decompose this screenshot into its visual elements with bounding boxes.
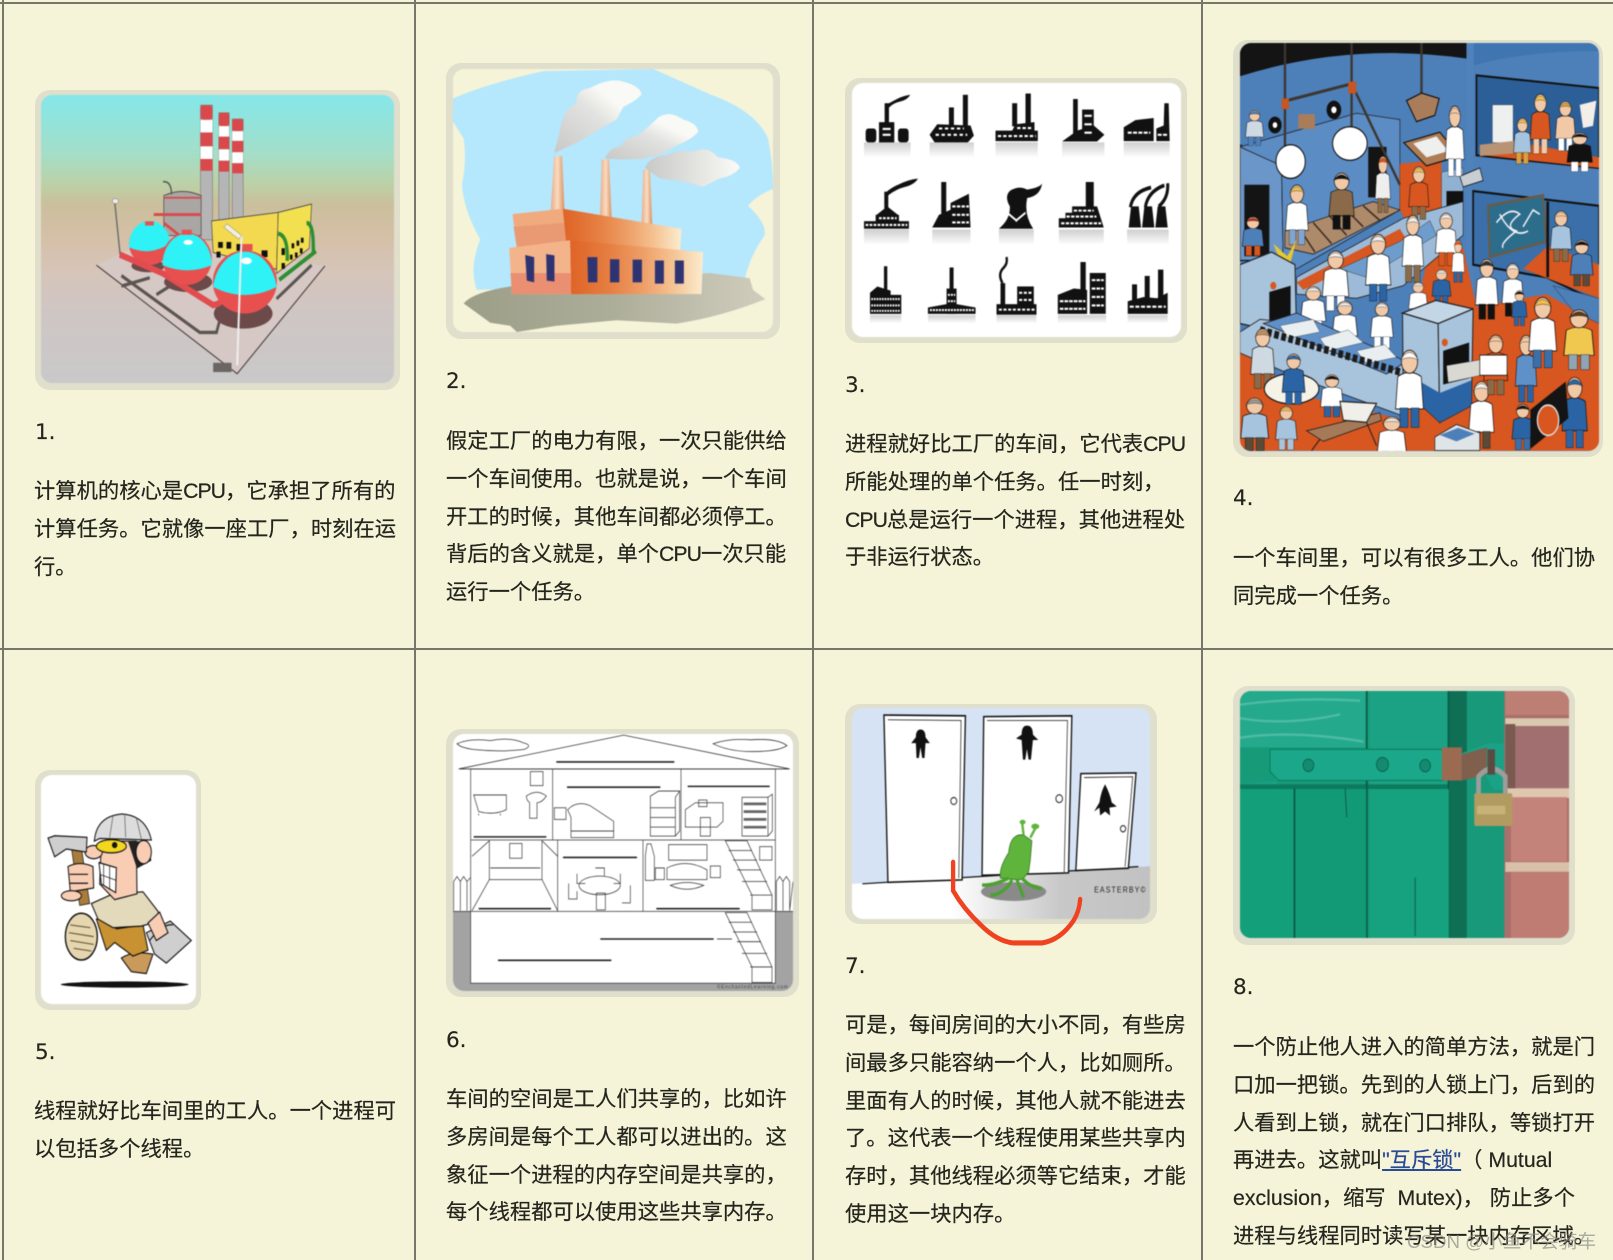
description text: 同完成一个任务。 [1233, 584, 1403, 608]
illustration: alien in front of three doors [852, 708, 1150, 920]
orange floor [1240, 248, 1599, 451]
step number: 4. [1233, 486, 1254, 511]
step number: 3. [845, 373, 866, 398]
description text [446, 1087, 787, 1224]
top right window [1476, 75, 1599, 168]
image frame [845, 704, 1157, 924]
illustration: alien in front of three doors: EASTERBY© [1094, 885, 1146, 895]
description text: 一个车间里，可以有很多工人。他们协 [1233, 546, 1595, 570]
image frame [446, 729, 799, 997]
blue gallery wall [1240, 145, 1283, 260]
illustration: green door with padlock [1239, 690, 1570, 939]
description text [845, 1013, 1186, 1226]
illustration: busy workshop cartoon [1239, 42, 1600, 452]
step number: 1. [35, 420, 56, 445]
rear conveyor [1297, 202, 1463, 298]
step number: 7. [845, 954, 866, 979]
panel: step 5 thread worker [34, 770, 396, 1161]
catwalk [1285, 202, 1400, 254]
description text: 使用这一块内存。 [845, 1202, 1015, 1226]
description text: 人看到上锁，就在门口排队，等锁打开 [1233, 1111, 1595, 1135]
illustration: running worker with hammer [41, 775, 196, 1004]
panel: step 1 CPU factory [34, 90, 400, 579]
image frame [446, 63, 780, 339]
step number: 2. [446, 369, 467, 394]
description text [446, 429, 787, 604]
illustration: house floor plan: ©EnchantedLearning.com [717, 983, 788, 991]
front conveyor [1301, 287, 1326, 332]
panel: step 8 mutex padlock [1233, 686, 1595, 1248]
middle right window [1473, 191, 1599, 303]
description text: 以包括多个线程。 [34, 1137, 204, 1161]
red highlight curve over the small door [950, 860, 1082, 946]
foreground people [1251, 329, 1275, 389]
image frame [1233, 40, 1603, 457]
image frame [845, 78, 1187, 343]
description text: 一个防止他人进入的简单方法，就是门 [1233, 1035, 1595, 1059]
illustration: refinery factory [40, 94, 394, 383]
center machine [1403, 313, 1440, 422]
description text: 线程就好比车间里的工人。一个进程可 [34, 1099, 396, 1123]
description text: 开工的时候，其他车间都必须停工。 [446, 505, 787, 529]
description text: 计算机的核心是CPU，它承担了所有的 [34, 479, 395, 503]
illustration: fifteen factory silhouettes [852, 83, 1181, 337]
panel: step 3 process workshops [845, 78, 1187, 569]
description text [1233, 546, 1595, 608]
description text: 行。 [34, 555, 77, 579]
description text: 可是，每间房间的大小不同，有些房 [845, 1013, 1186, 1037]
chains and speech bubbles [1285, 43, 1421, 185]
description text: 所能处理的单个任务。任一时刻， [845, 470, 1164, 494]
description text: 假定工厂的电力有限，一次只能供给 [446, 429, 787, 453]
illustration: factory with smoke [453, 69, 773, 332]
panel: step 6 shared rooms [446, 729, 799, 1224]
panel: step 2 limited power factory [446, 63, 787, 604]
watermark: CSDN @小鱼不会骑车 [1407, 1231, 1596, 1252]
image frame [1233, 686, 1575, 945]
description text: 里面有人的时候，其他人就不能进去 [845, 1089, 1186, 1113]
description text: 于非运行状态。 [845, 545, 994, 569]
description text: 了。这代表一个线程使用某些共享内 [845, 1126, 1186, 1150]
description text: CPU总是运行一个进程，其他进程处 [845, 508, 1185, 532]
step number: 6. [446, 1028, 467, 1053]
description text [845, 432, 1185, 569]
description text: 进程就好比工厂的车间，它代表CPU [845, 432, 1185, 456]
description text: 多房间是每个工人都可以进出的。这 [446, 1125, 787, 1149]
description text [34, 1099, 396, 1161]
description text: 存时，其他线程必须等它结束，才能 [845, 1164, 1186, 1188]
description text: 再进去。这就叫"互斥锁"（ Mutual [1233, 1148, 1552, 1172]
description text [1233, 1035, 1595, 1248]
description text: 口加一把锁。先到的人锁上门，后到的 [1233, 1073, 1595, 1097]
description text: 每个线程都可以使用这些共享内存。 [446, 1200, 787, 1224]
description text [34, 479, 396, 579]
description text: 车间的空间是工人们共享的，比如许 [446, 1087, 787, 1111]
description text: exclusion，缩写 Mutex)， 防止多个 [1233, 1186, 1575, 1210]
step number: 8. [1233, 975, 1254, 1000]
description text: 间最多只能容纳一个人，比如厕所。 [845, 1051, 1186, 1075]
illustration: house floor plan [453, 734, 793, 991]
panel: step 4 workers in workshop [1233, 40, 1603, 608]
image frame [35, 770, 201, 1010]
description text: 象征一个进程的内存空间是共享的， [446, 1163, 787, 1187]
step number: 5. [35, 1040, 56, 1065]
description text: 进程与线程同时读写某一块内存区域。 [1233, 1224, 1595, 1248]
description text: 一个车间使用。也就是说，一个车间 [446, 467, 787, 491]
description text: 计算任务。它就像一座工厂，时刻在运 [34, 517, 396, 541]
panel: step 7 toilet lock [845, 704, 1186, 1226]
image frame [35, 90, 400, 390]
description text: 背后的含义就是，单个CPU一次只能 [446, 542, 786, 566]
description text: 运行一个任务。 [446, 580, 595, 604]
left machine [1240, 252, 1297, 336]
